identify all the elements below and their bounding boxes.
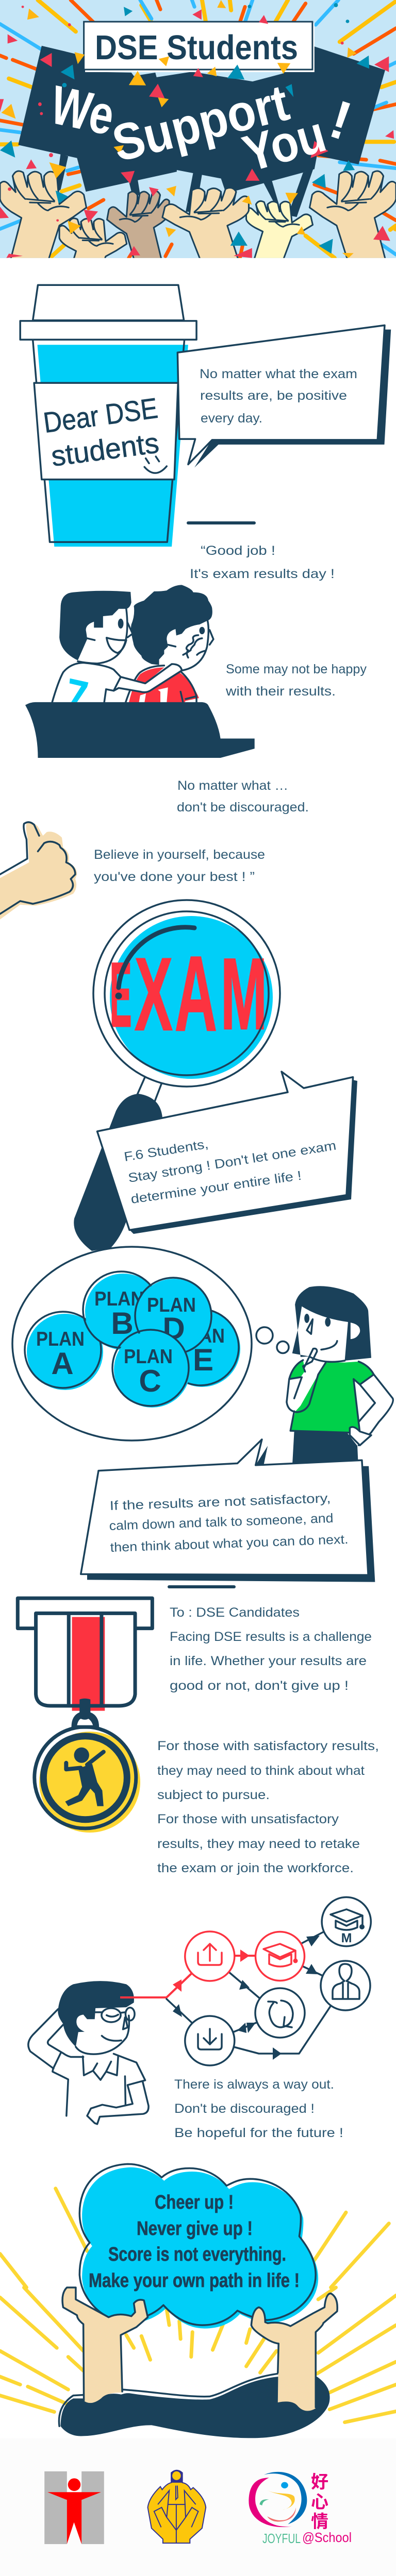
- cloud message: Score is not everything.: [108, 2244, 286, 2265]
- hero banner: [0, 0, 396, 281]
- text: for those with results: For those with unsatisfactory: [157, 1812, 339, 1826]
- dark paths: [167, 1932, 331, 2054]
- speech bubble: F.6 students: F.6 Students,: [123, 1137, 209, 1164]
- text: to DSE candidates: good or not, don't give up !: [170, 1679, 349, 1693]
- text: for those with results: subject to pursue.: [157, 1788, 270, 1802]
- text: there is always a way out: There is always a way out.: [174, 2077, 334, 2092]
- thought bubble with plans: [12, 1247, 252, 1440]
- exam word: [110, 935, 267, 1054]
- plan C: PLAN: [124, 1346, 173, 1368]
- hero heading: DSE Students: DSE Students: [95, 28, 298, 67]
- speech bubble: be positive: every day.: [201, 411, 262, 426]
- red path: [120, 1956, 256, 1997]
- thinking boy: [28, 1981, 148, 2124]
- sun rays: [0, 2189, 396, 2422]
- text: to DSE candidates: Facing DSE results is a challenge: [170, 1630, 372, 1644]
- speech bubble: F.6 students: determine your entire life !: [130, 1168, 303, 1207]
- cloud message: [89, 2192, 300, 2292]
- text: believe in yourself: Believe in yourself, because: [94, 848, 265, 862]
- thinking girl: [287, 1286, 393, 1463]
- arrow heads: [173, 1936, 320, 2060]
- icon: thumbs up: [0, 822, 77, 920]
- icon: M graduation cap: M: [341, 1931, 352, 1945]
- speech bubble: F.6 students: [97, 1072, 357, 1234]
- text: there is always a way out: [174, 2077, 343, 2140]
- speech bubble: be positive: results are, be positive: [200, 388, 347, 403]
- icon: download: [198, 2029, 222, 2049]
- cup sleeve text: students: [49, 426, 161, 472]
- text: to DSE candidates: To : DSE Candidates: [170, 1605, 300, 1620]
- hero slogan: exclamation mark: !: [323, 89, 358, 152]
- coffee cup illustration: [20, 285, 196, 547]
- plan A: [25, 1312, 103, 1390]
- exam word: M: [221, 937, 267, 1050]
- quote text: good job: “Good job !: [201, 544, 275, 558]
- plan C: [112, 1330, 190, 1408]
- plan A: PLAN: [36, 1328, 85, 1350]
- speech bubble: if the results are not satisfactory: [81, 1439, 375, 1582]
- plan E: [162, 1309, 240, 1387]
- logo: red figure: [44, 2471, 104, 2544]
- text: there is always a way out: Be hopeful for the future !: [174, 2126, 343, 2140]
- quote text: good job: It's exam results day !: [190, 567, 335, 581]
- text: believe in yourself: [94, 848, 265, 884]
- two students illustration: [25, 585, 255, 758]
- icon: medal: [18, 1598, 152, 1833]
- cup sleeve text: Dear DSE: [41, 392, 160, 439]
- text: for those with results: results, they may need to retake: [157, 1837, 360, 1851]
- speech bubble: if the results are not satisfactory: then think about what you can do next.: [110, 1532, 349, 1555]
- exam word: X: [135, 937, 173, 1052]
- plan C: C: [139, 1364, 161, 1398]
- text: for those with results: the exam or join the workforce.: [157, 1861, 354, 1875]
- logo: joyful at school: 好: [311, 2472, 328, 2492]
- speech bubble: F.6 students: Stay strong ! Don't let one exam: [127, 1138, 337, 1185]
- icon: loop: [268, 2001, 293, 2027]
- cloud message: Cheer up !: [155, 2192, 234, 2213]
- cloud message: Never give up !: [137, 2218, 253, 2240]
- speech bubble: if the results are not satisfactory: calm down and talk to someone, and: [109, 1511, 334, 1533]
- section rule: [168, 1585, 236, 1588]
- icon: red graduation cap: [263, 1944, 298, 1967]
- hero slogan: We: We: [45, 74, 120, 147]
- logo: joyful at school: 情: [311, 2512, 328, 2532]
- icon: upload: [198, 1944, 222, 1965]
- speech bubble: be positive: No matter what the exam: [200, 367, 357, 381]
- logo: joyful at school: [249, 2472, 352, 2546]
- hero slogan: Support: Support: [107, 74, 294, 173]
- logo: joyful at school: @School: [302, 2530, 352, 2545]
- text: for those with results: they may need to think about what: [157, 1764, 365, 1778]
- exam word: A: [175, 935, 217, 1054]
- plan E: E: [193, 1343, 213, 1377]
- text: to DSE candidates: [170, 1605, 372, 1693]
- logo: joyful at school: JOYFUL: [262, 2531, 301, 2546]
- magnifying glass with EXAM: [74, 900, 280, 1251]
- text: no matter what: [177, 778, 309, 815]
- text: no matter what: No matter what …: [177, 778, 288, 793]
- text: there is always a way out: Don't be discouraged !: [174, 2102, 315, 2116]
- icon: M graduation cap: [331, 1909, 365, 1945]
- text: to DSE candidates: in life. Whether your results are: [170, 1654, 367, 1668]
- plan E: PLAN: [176, 1325, 225, 1347]
- text: for those with results: [157, 1739, 379, 1875]
- text: for those with results: For those with satisfactory results,: [157, 1739, 379, 1753]
- icon: worker: [333, 1964, 359, 1999]
- plan D: PLAN: [147, 1294, 196, 1316]
- speech bubble: be positive: [177, 325, 391, 467]
- plan B: B: [111, 1306, 134, 1341]
- logo: yellow hands: [148, 2470, 206, 2543]
- footer background: [0, 2438, 396, 2576]
- cloud banner: [79, 2164, 318, 2329]
- flow chart of pathways: [120, 1897, 371, 2065]
- text: some may not be happy: Some may not be happy: [226, 662, 367, 676]
- hero slogan: You: You: [237, 105, 332, 183]
- text: some may not be happy: [225, 662, 367, 699]
- exam word: E: [110, 944, 132, 1046]
- plan B: [83, 1272, 161, 1350]
- section rule: [187, 521, 256, 524]
- quote text: good job: [190, 544, 335, 581]
- text: no matter what: don't be discouraged.: [177, 800, 309, 815]
- logo: joyful at school: 心: [311, 2493, 328, 2512]
- plan D: [135, 1278, 212, 1355]
- thought dots: [256, 1327, 289, 1353]
- speech bubble: if the results are not satisfactory: If the results are not satisfactory,: [109, 1491, 331, 1513]
- text: some may not be happy: with their results.: [225, 684, 336, 699]
- text: believe in yourself: you've done your best ! ”: [94, 870, 255, 884]
- plan D: D: [162, 1311, 185, 1346]
- plan B: PLAN: [94, 1288, 144, 1310]
- hands holding the cloud: [59, 2287, 337, 2438]
- plan A: A: [51, 1346, 74, 1381]
- cloud message: Make your own path in life !: [89, 2270, 300, 2292]
- confetti streaks and signs: [0, 0, 396, 281]
